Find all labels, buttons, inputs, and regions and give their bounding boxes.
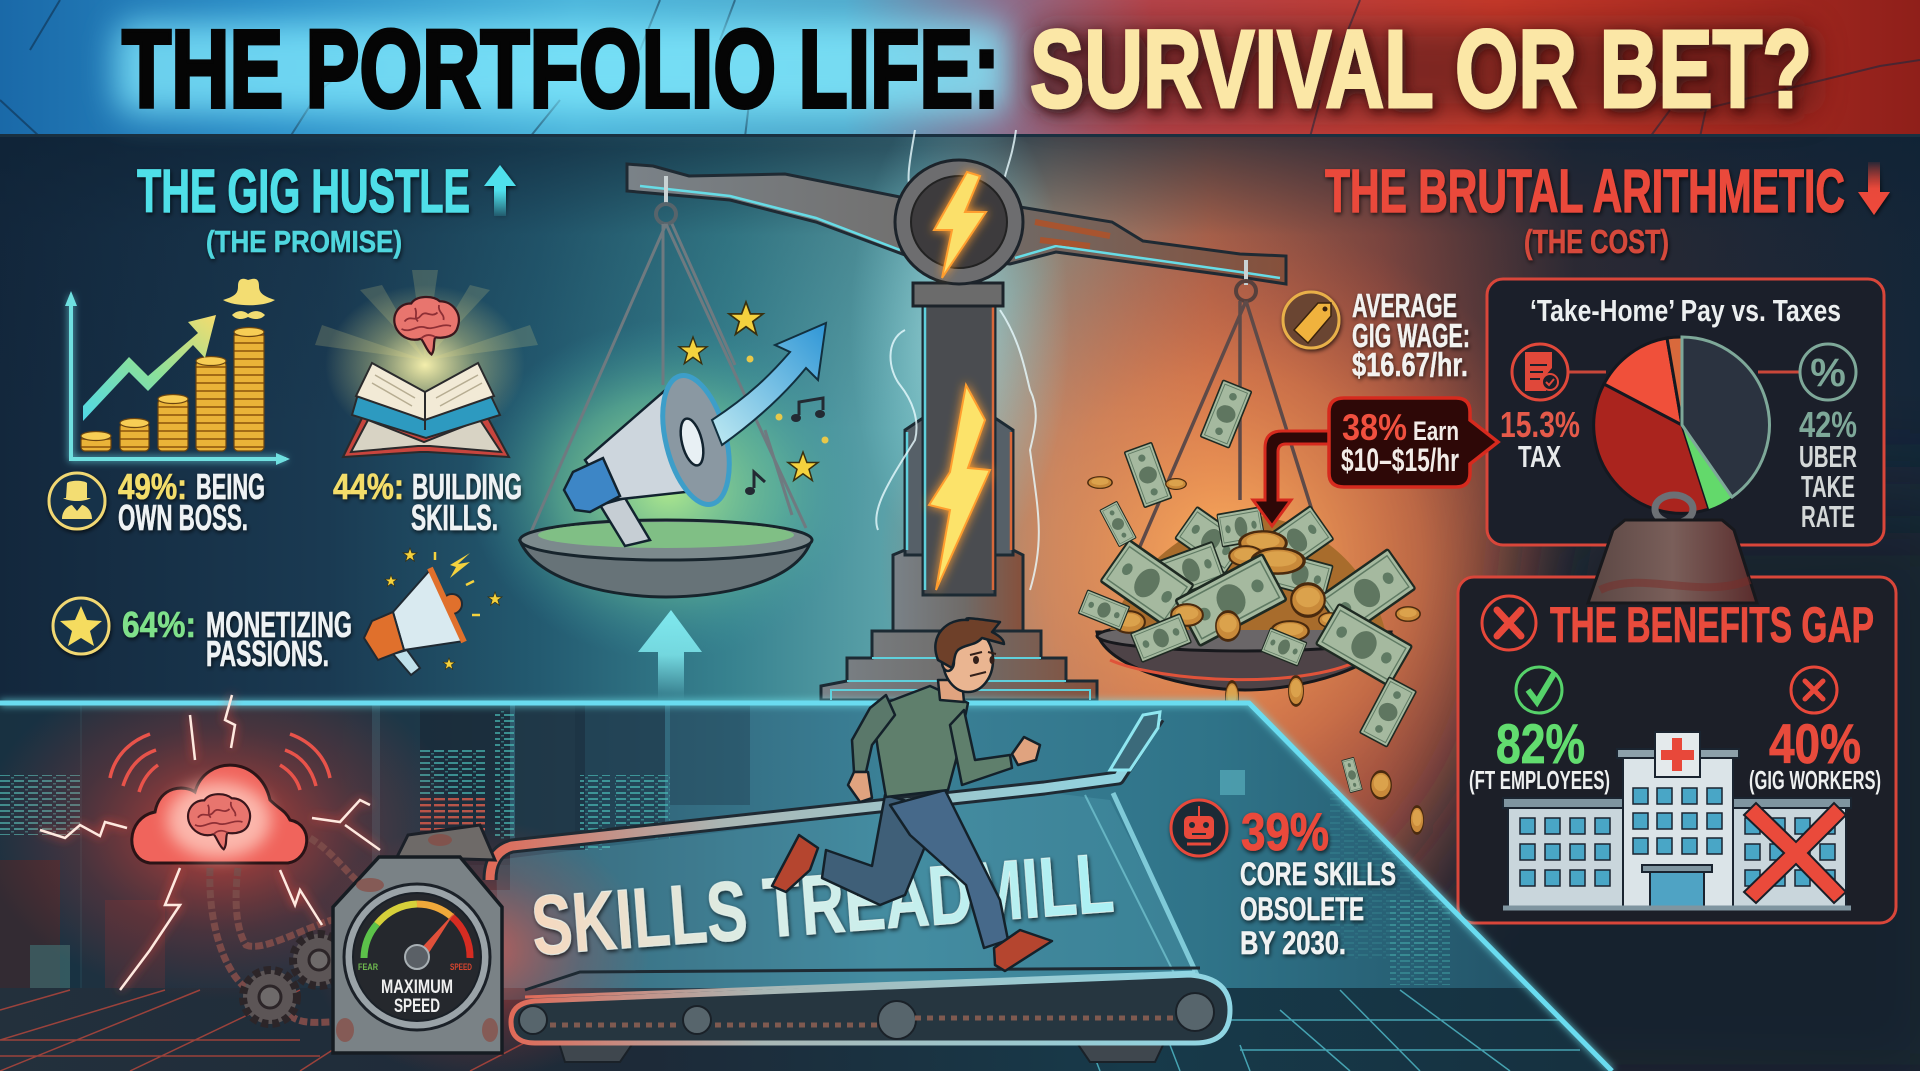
- stat label: BY 2030.: [1240, 925, 1346, 961]
- neck and head: [938, 680, 964, 702]
- wage text: AVERAGE: [1352, 287, 1457, 324]
- stat: 15.3 percent: 15.3%: [1500, 404, 1580, 445]
- stat value: 44%:: [333, 466, 404, 507]
- blue arrow: [712, 323, 826, 445]
- icon: robot: [1171, 800, 1227, 856]
- icon: small orange megaphone: [364, 548, 502, 675]
- label: uber take rate: TAKE: [1801, 469, 1855, 504]
- pie chart: [1594, 337, 1769, 513]
- stat: 42 percent: 42%: [1799, 404, 1857, 445]
- slice: dark: [1682, 337, 1769, 497]
- slice: orange: [1667, 337, 1682, 425]
- icon: speed gauge: [333, 825, 502, 1053]
- icon: small red cross: [1791, 667, 1837, 713]
- belt: [511, 975, 1230, 1043]
- left arm: [852, 695, 895, 772]
- windows: [1520, 788, 1835, 886]
- hub: [895, 160, 1023, 284]
- torso: [872, 686, 968, 797]
- back leg: [822, 795, 940, 905]
- callout word: Earn: [1413, 416, 1459, 446]
- treadmill: [490, 712, 1230, 1062]
- big megaphone: [564, 369, 741, 546]
- left strings: [531, 224, 806, 532]
- icon: percent: [1800, 344, 1856, 400]
- callout: 38 percent earn 10 to 15 dollars: [1253, 398, 1498, 526]
- icon: boss badge: [49, 473, 105, 529]
- icon: gears: [243, 934, 345, 1024]
- pan bowl: [520, 541, 811, 597]
- right hook: [1244, 260, 1248, 285]
- stat label: BEING: [196, 466, 265, 507]
- stat: 49 percent being own boss: [49, 466, 265, 538]
- gauge title: SPEED: [394, 996, 440, 1017]
- glass deck: [496, 792, 1204, 1000]
- label: tax: TAX: [1518, 439, 1561, 474]
- label: uber take rate: UBER: [1799, 439, 1857, 474]
- icon: percent: %: [1810, 351, 1846, 395]
- callout range: $10–$15/hr: [1341, 442, 1459, 478]
- right arm: [950, 710, 1012, 785]
- icon: price tag: [1283, 292, 1339, 348]
- icon: overheating cloud brain: [40, 695, 380, 1022]
- dial: [364, 904, 470, 958]
- stat: 82 percent: 82%: [1496, 712, 1585, 775]
- panel outline: [0, 703, 1612, 1071]
- icon: big red x: [1744, 803, 1846, 903]
- back shoe: [772, 835, 818, 892]
- chains: [210, 838, 356, 1022]
- chart: rising coin stacks: [65, 279, 290, 465]
- stat: average gig wage: [1283, 287, 1470, 383]
- stat label: MONETIZING: [206, 604, 352, 645]
- pillar base: [821, 295, 1097, 700]
- rail: [490, 717, 1158, 880]
- title: left part: THE PORTFOLIO LIFE:: [122, 8, 1000, 131]
- connectors: [1568, 370, 1800, 374]
- subheading: (THE COST): [1524, 223, 1669, 260]
- pillar lightning: [929, 385, 990, 590]
- coin stacks: [81, 328, 264, 451]
- wage text: $16.67/hr.: [1352, 346, 1468, 383]
- arrow: elbow down into money pile: [1253, 431, 1332, 526]
- money pile: [1078, 506, 1415, 686]
- gauge labels: FEAR: [358, 962, 378, 972]
- label: uber take rate: RATE: [1801, 499, 1855, 534]
- panel: skills treadmill backdrop: [0, 706, 1608, 1071]
- header banner: [0, 0, 1920, 137]
- callout value: 38%: [1342, 407, 1407, 448]
- beam: [627, 164, 1286, 284]
- icon: star badge: [53, 598, 109, 654]
- heading: THE GIG HUSTLE: [137, 157, 470, 225]
- icon: tax form: [1512, 344, 1568, 400]
- right strings: [1138, 301, 1345, 615]
- stat: 39 percent core skills obsolete: [1171, 800, 1396, 961]
- lightning bolts: [40, 695, 380, 990]
- pan bowl: [1097, 632, 1391, 690]
- icon: balance scale: [531, 130, 1345, 700]
- icon: green check: [1516, 667, 1562, 713]
- icon: hospital: [1503, 732, 1851, 908]
- book: [343, 363, 509, 457]
- gauge label speed: SPEED: [450, 962, 472, 972]
- brain: [188, 794, 250, 849]
- slice: green: [1682, 425, 1732, 509]
- hair: [935, 618, 1004, 668]
- face: [970, 652, 996, 676]
- slice: dark red: [1594, 384, 1709, 513]
- falling bills and coins: [1088, 380, 1424, 834]
- panel: the benefits gap: [1458, 495, 1896, 923]
- stat value: 64%:: [122, 604, 196, 645]
- floor grid: [0, 988, 1620, 1071]
- cloud: [132, 765, 307, 863]
- left hook: [664, 176, 668, 204]
- feet: [559, 1043, 1164, 1062]
- electric arcs: [876, 130, 1039, 590]
- icon: running man: [772, 618, 1052, 971]
- label: ft employees: (FT EMPLOYEES): [1469, 765, 1610, 795]
- subheading: (THE PROMISE): [206, 224, 402, 259]
- zigzag arrow: [83, 315, 216, 421]
- stars and music notes: [679, 302, 828, 495]
- left pan with megaphone: [520, 302, 828, 597]
- label: skills treadmill: SKILLS TREADMILL: [528, 836, 1117, 973]
- stat label line two: OWN BOSS.: [118, 497, 248, 538]
- support post: [1113, 793, 1204, 990]
- brain: [394, 297, 459, 354]
- stat: 64 percent monetizing passions: [53, 598, 352, 674]
- front leg: [890, 790, 1008, 948]
- wage text: GIG WAGE:: [1352, 317, 1470, 354]
- hub cap: [913, 283, 1003, 306]
- icon: weight: [1588, 495, 1757, 603]
- front shoe: [994, 930, 1052, 971]
- icon: up arrow: [484, 165, 516, 216]
- red cloud glow: [0, 706, 442, 986]
- right pan with money pile: [1078, 380, 1424, 834]
- panel: take-home pay vs taxes: [1487, 279, 1884, 545]
- radio arcs: [110, 734, 330, 792]
- stat value: 39%: [1241, 803, 1329, 862]
- rollers: [519, 993, 1214, 1039]
- stat label line two: PASSIONS.: [206, 633, 329, 674]
- icon: red x circle: [1482, 596, 1536, 650]
- icon: down arrow: [1858, 162, 1890, 215]
- gauge title: MAXIMUM: [381, 977, 453, 998]
- heading: the brutal arithmetic: [1325, 157, 1890, 260]
- stat: 40 percent: 40%: [1769, 712, 1861, 775]
- stat: 44 percent building skills: [333, 466, 522, 538]
- panel title: ‘Take-Home’ Pay vs. Taxes: [1530, 293, 1841, 328]
- stat label: OBSOLETE: [1240, 891, 1364, 927]
- needle: [413, 912, 455, 962]
- up arrow under left pan: [638, 610, 702, 700]
- city backdrop: [0, 705, 1450, 988]
- icon: hat and moustache: [223, 279, 275, 319]
- callout box: [1329, 398, 1498, 487]
- stat label: BUILDING: [412, 466, 522, 507]
- slice: bright red: [1604, 338, 1682, 425]
- stat label: CORE SKILLS: [1240, 856, 1396, 892]
- panel: the gig hustle heading: [137, 157, 516, 259]
- console: [1110, 712, 1160, 770]
- icon: open book and glowing brain: [315, 270, 538, 457]
- stat label line two: SKILLS.: [411, 497, 498, 538]
- stat value: 49%:: [118, 466, 187, 507]
